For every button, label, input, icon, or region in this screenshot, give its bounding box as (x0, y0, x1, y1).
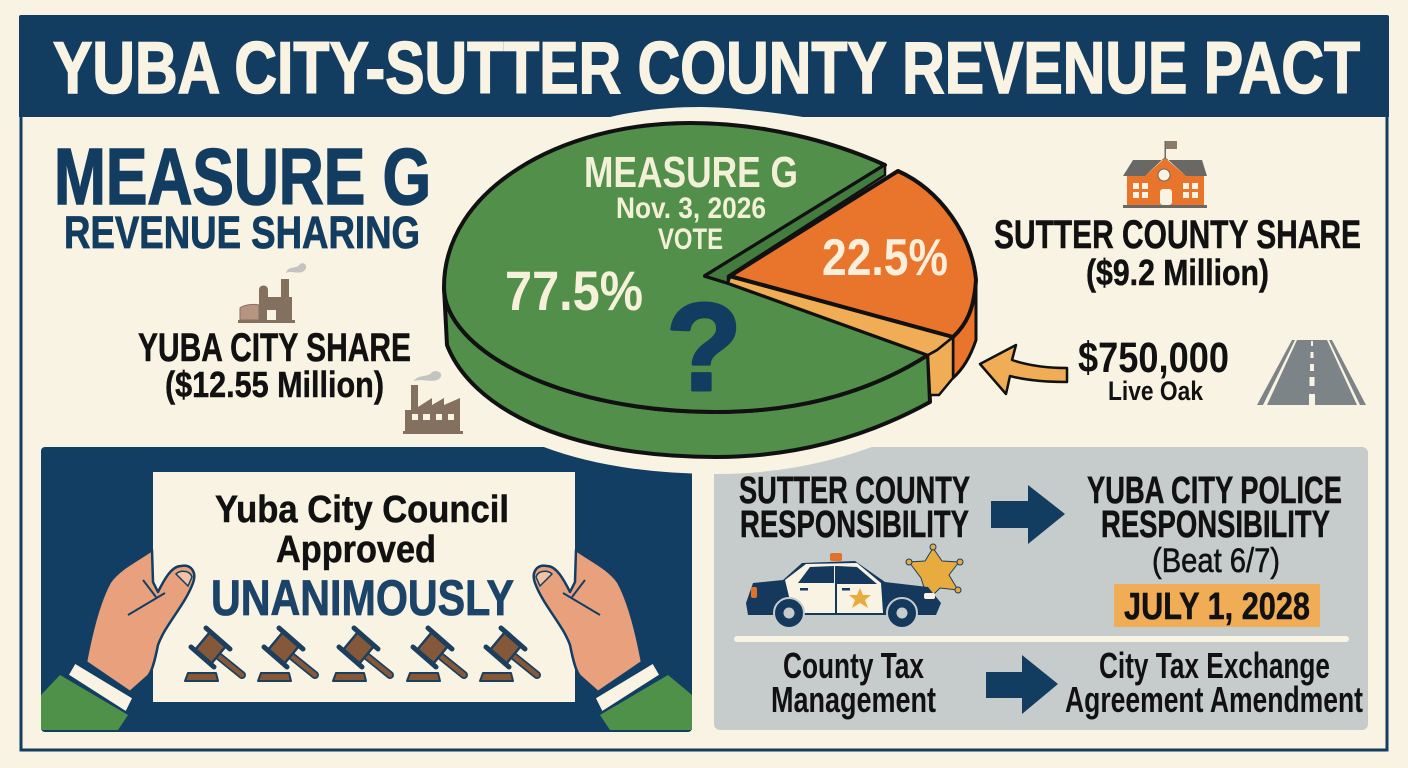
text: Sutter County responsibility (739, 470, 970, 546)
text: Sutter County share: ($9.2 Million) (1086, 252, 1269, 293)
text: county tax management (771, 645, 936, 720)
icon: sheriff star (906, 544, 963, 600)
slice: 750k sliver side (928, 337, 953, 395)
paper sign (153, 472, 575, 702)
pie text: ? (666, 279, 742, 417)
pie text: VOTE (658, 223, 723, 256)
paper sign: Approved (276, 529, 436, 571)
text: Sutter County responsibility: RESPONSIBILITY (740, 504, 969, 546)
heading: Measure G revenue sharing: REVENUE SHARING (64, 207, 420, 258)
icon: police car (746, 553, 941, 628)
text: Yuba City police responsibility (1087, 470, 1342, 580)
paper sign: UNANIMOUSLY (211, 570, 514, 626)
text: Live Oak amount: Live Oak (1108, 376, 1204, 406)
text: county tax management: Management (771, 679, 936, 720)
pie text: 22.5% (822, 229, 948, 287)
text: Live Oak amount: $750,000 (1078, 334, 1229, 382)
panel: council approval (41, 447, 692, 732)
icon: school building (1123, 141, 1207, 208)
icon: road (1257, 340, 1366, 405)
heading: Measure G revenue sharing: MEASURE G (54, 132, 431, 221)
slice: 750k sliver top (728, 277, 953, 355)
text: city tax exchange agreement amendment (1065, 645, 1363, 720)
icon: left hand and sleeve (41, 550, 194, 730)
icon: large factory (403, 371, 463, 434)
text: Yuba City police responsibility: (Beat 6/7) (1152, 542, 1280, 580)
arrow: responsibility (991, 485, 1065, 544)
text: Live Oak amount (1078, 334, 1229, 406)
panel: responsibility transfer (714, 447, 1368, 730)
text: Yuba City share: ($12.55 Million) (165, 364, 384, 405)
icon: right hand and sleeve (534, 550, 692, 730)
text: city tax exchange agreement amendment: City Tax Exchange (1099, 645, 1330, 686)
text: county tax management: County Tax (783, 645, 924, 686)
heading: Measure G revenue sharing (54, 132, 431, 258)
wedge inner wall (705, 165, 885, 283)
slice: orange side wall (953, 280, 976, 378)
pie text: Nov. 3, 2026 (616, 192, 766, 225)
icon: five gavels (185, 628, 537, 681)
text: Sutter County share (994, 213, 1361, 293)
paper sign: Yuba City Council (215, 489, 509, 531)
text: Yuba City share (138, 326, 411, 405)
title banner (19, 15, 1389, 117)
text: Sutter County responsibility: SUTTER COUNTY (739, 470, 970, 512)
date badge: JULY 1, 2028 (1124, 586, 1310, 628)
pie text (505, 148, 948, 417)
slice: green side wall (444, 287, 930, 457)
arrow: tax (986, 655, 1058, 714)
icon: small factory (238, 263, 306, 323)
pie text: 77.5% (505, 259, 643, 322)
text: Yuba City share: YUBA CITY SHARE (138, 326, 411, 370)
arrow: Live Oak to pie (980, 345, 1067, 394)
slice: 77.5% Yuba City (444, 123, 928, 412)
slice: 22.5% Sutter County (730, 171, 976, 337)
pie text: MEASURE G (584, 148, 798, 197)
pie chart: revenue split (444, 123, 976, 457)
